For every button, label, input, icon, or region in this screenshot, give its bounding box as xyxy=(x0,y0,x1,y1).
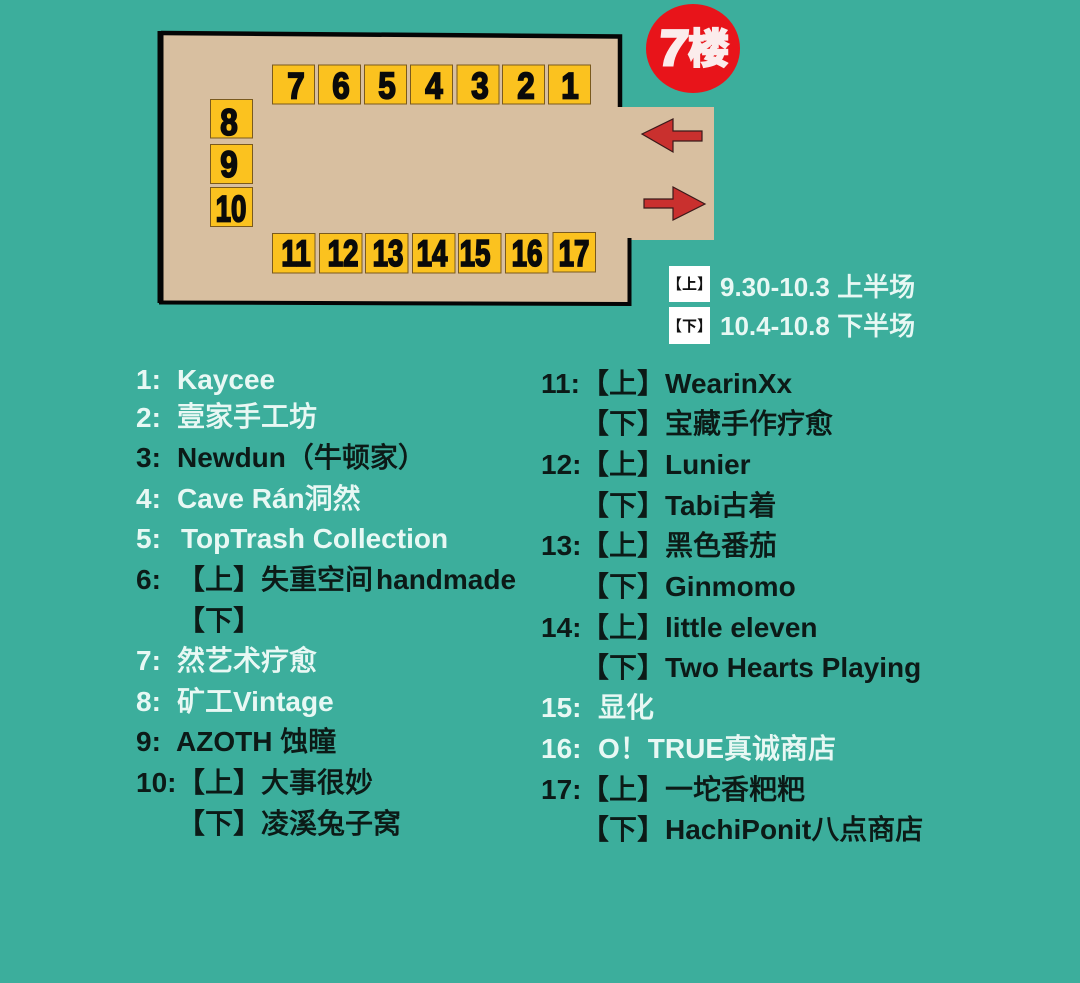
booths top row xyxy=(272,65,590,107)
item 11: 11: xyxy=(541,368,580,399)
item 13: 13: xyxy=(541,530,581,561)
floor badge: 7 xyxy=(656,19,691,76)
booths top row: 3 xyxy=(471,66,489,107)
item 6: 【上】失重空间handmade xyxy=(177,564,516,595)
booths bottom row: 12 xyxy=(328,232,358,274)
vendor list right column xyxy=(541,368,923,845)
legend row: second half: 【下】 xyxy=(667,318,712,335)
item 13: 【下】Ginmomo xyxy=(581,571,796,602)
item 11 xyxy=(541,368,833,439)
item 5: TopTrash Collection xyxy=(181,523,448,554)
item 17 xyxy=(541,774,923,845)
item 3: 3: xyxy=(136,442,161,473)
item 17: 【上】一坨香粑粑 xyxy=(581,774,805,805)
floor badge xyxy=(646,4,740,93)
legend row: second half: 10.4-10.8 下半场 xyxy=(720,311,915,341)
arrow: entrance xyxy=(644,187,705,220)
item 10: 10: xyxy=(136,767,176,798)
item 16: 16: xyxy=(541,733,581,764)
booths bottom row: 17 xyxy=(559,232,589,274)
item 4: Cave Rán洞然 xyxy=(177,483,361,514)
booths bottom row: 15 xyxy=(460,232,490,274)
item 14: 【上】little eleven xyxy=(581,612,818,643)
booths bottom row: 16 xyxy=(512,232,542,274)
booths bottom row: 14 xyxy=(417,232,447,274)
item 17: 【下】HachiPonit八点商店 xyxy=(581,814,923,845)
item 5: 5: xyxy=(136,523,161,554)
item 16: O！TRUE真诚商店 xyxy=(598,733,836,764)
item 15: 显化 xyxy=(598,692,654,723)
item 12: 【下】Tabi古着 xyxy=(581,490,777,521)
booths bottom row: 11 xyxy=(281,232,311,274)
item 14 xyxy=(541,612,921,683)
booths left column: 8 xyxy=(220,103,238,144)
floor area xyxy=(161,33,714,303)
legend row: first half: 9.30-10.3 上半场 xyxy=(720,272,915,302)
floor badge: 楼 xyxy=(688,26,729,72)
item 1: Kaycee xyxy=(177,364,275,395)
item 11: 【下】宝藏手作疗愈 xyxy=(581,408,833,439)
item 15 xyxy=(541,692,654,723)
legend row: first half: 【上】 xyxy=(667,276,712,293)
item 10: 【上】大事很妙 xyxy=(177,767,373,798)
booths top row: 7 xyxy=(287,66,305,107)
legend row: first half xyxy=(667,266,915,302)
booths bottom row: 13 xyxy=(373,232,403,274)
item 6 xyxy=(136,564,516,636)
item 15: 15: xyxy=(541,692,581,723)
item 13 xyxy=(541,530,796,602)
item 10: 【下】凌溪兔子窝 xyxy=(177,808,401,839)
item 9: 9: xyxy=(136,726,161,757)
item 4: 4: xyxy=(136,483,161,514)
legend xyxy=(667,266,915,344)
item 12 xyxy=(541,449,777,521)
item 6: 6: xyxy=(136,564,161,595)
booths left column: 10 xyxy=(216,188,246,229)
item 8: 8: xyxy=(136,686,161,717)
item 13: 【上】黑色番茄 xyxy=(581,530,777,561)
booths top row: 5 xyxy=(378,66,396,107)
item 10 xyxy=(136,767,401,839)
booths left column xyxy=(210,100,252,229)
booths top row: 4 xyxy=(425,66,443,107)
booths top row: 2 xyxy=(517,66,535,107)
item 12: 【上】Lunier xyxy=(581,449,751,480)
vendor list left column xyxy=(136,364,516,839)
item 7: 然艺术疗愈 xyxy=(177,645,317,676)
booths left column: 9 xyxy=(220,145,238,186)
item 2: 壹家手工坊 xyxy=(177,401,317,432)
item 9: AZOTH 蚀瞳 xyxy=(176,726,336,757)
item 7: 7: xyxy=(136,645,161,676)
item 6: 【下】 xyxy=(177,605,261,636)
item 14: 14: xyxy=(541,612,581,643)
item 17: 17: xyxy=(541,774,581,805)
item 8: 矿工Vintage xyxy=(177,686,334,717)
booths top row: 1 xyxy=(561,66,579,107)
item 3: Newdun（牛顿家） xyxy=(177,442,426,473)
booths top row: 6 xyxy=(332,66,350,107)
floor plan xyxy=(159,31,714,304)
item 12: 12: xyxy=(541,449,581,480)
item 1: 1: xyxy=(136,364,161,395)
arrow: exit xyxy=(642,119,702,152)
item 2: 2: xyxy=(136,402,161,433)
outer walls xyxy=(161,33,620,107)
item 11: 【上】WearinXx xyxy=(581,368,793,399)
item 14: 【下】Two Hearts Playing xyxy=(581,652,921,683)
booths bottom row xyxy=(272,232,596,274)
legend row: second half xyxy=(667,307,915,344)
